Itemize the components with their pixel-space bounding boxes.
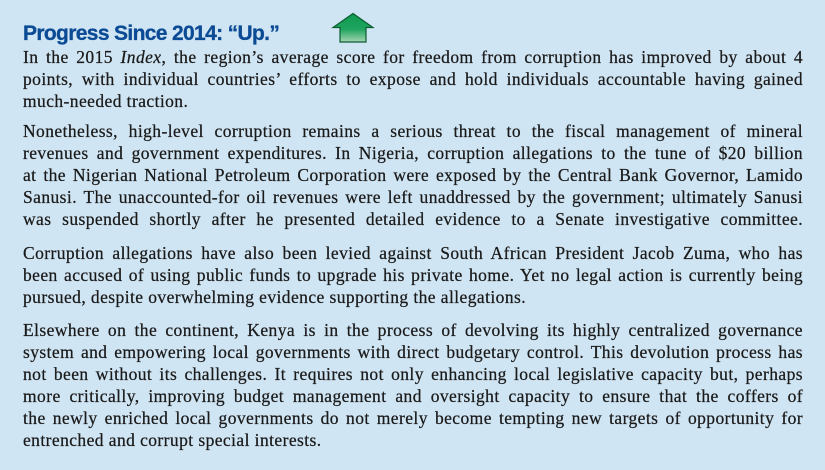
paragraph: regional score improvement: In the 2015 Index, the region’s average score for freedom from corruption has improved by about 4 [23,47,803,67]
paragraph: regional score improvement: points, with individual countries’ efforts to expose and hold individuals accountable having gained [23,69,803,89]
paragraph: Nigeria corruption allegations: revenues and government expenditures. In Nigeria, corruption allegations to the tune of $20 billion [23,143,803,163]
paragraph: Kenya devolution: Elsewhere on the continent, Kenya is in the process of devolving its highly centralized governance [23,320,803,340]
paragraph: Nigeria corruption allegations: was suspended shortly after he presented detailed evidence to a Senate investigative committee. [23,209,803,229]
paragraph: regional score improvement: much-needed traction. [23,91,188,111]
paragraph: South Africa allegations: been accused of using public funds to upgrade his private home. Yet no legal action is currently being [23,265,803,285]
paragraph: Kenya devolution: system and empowering local governments with direct budgetary control. This devolution process has [23,342,803,362]
paragraph: Kenya devolution: the newly enriched local governments do not merely become tempting new targets of opportunity for [23,408,803,428]
icon: green up arrow [331,12,375,43]
paragraph: Nigeria corruption allegations: Sanusi. The unaccounted-for oil revenues were left unaddressed by the government; ultimately Sanusi [23,187,803,207]
paragraph: South Africa allegations: Corruption allegations have also been levied against South African President Jacob Zuma, who has [23,243,803,263]
paragraph: Nigeria corruption allegations: Nonetheless, high-level corruption remains a serious threat to the fiscal management of mineral [23,121,803,141]
title: Progress Since 2014: “Up.” [23,22,279,45]
paragraph: Kenya devolution: not been without its challenges. It requires not only enhancing local legislative capacity but, perhaps [23,364,803,384]
paragraph: Kenya devolution: entrenched and corrupt special interests. [23,430,322,450]
paragraph: Kenya devolution: more critically, improving budget management and oversight capacity to ensure that the coffers of [23,386,803,406]
paragraph: Nigeria corruption allegations: at the Nigerian National Petroleum Corporation were exposed by the Central Bank Governor, Lamido [23,165,803,185]
paragraph: South Africa allegations: pursued, despite overwhelming evidence supporting the allegations. [23,287,526,307]
